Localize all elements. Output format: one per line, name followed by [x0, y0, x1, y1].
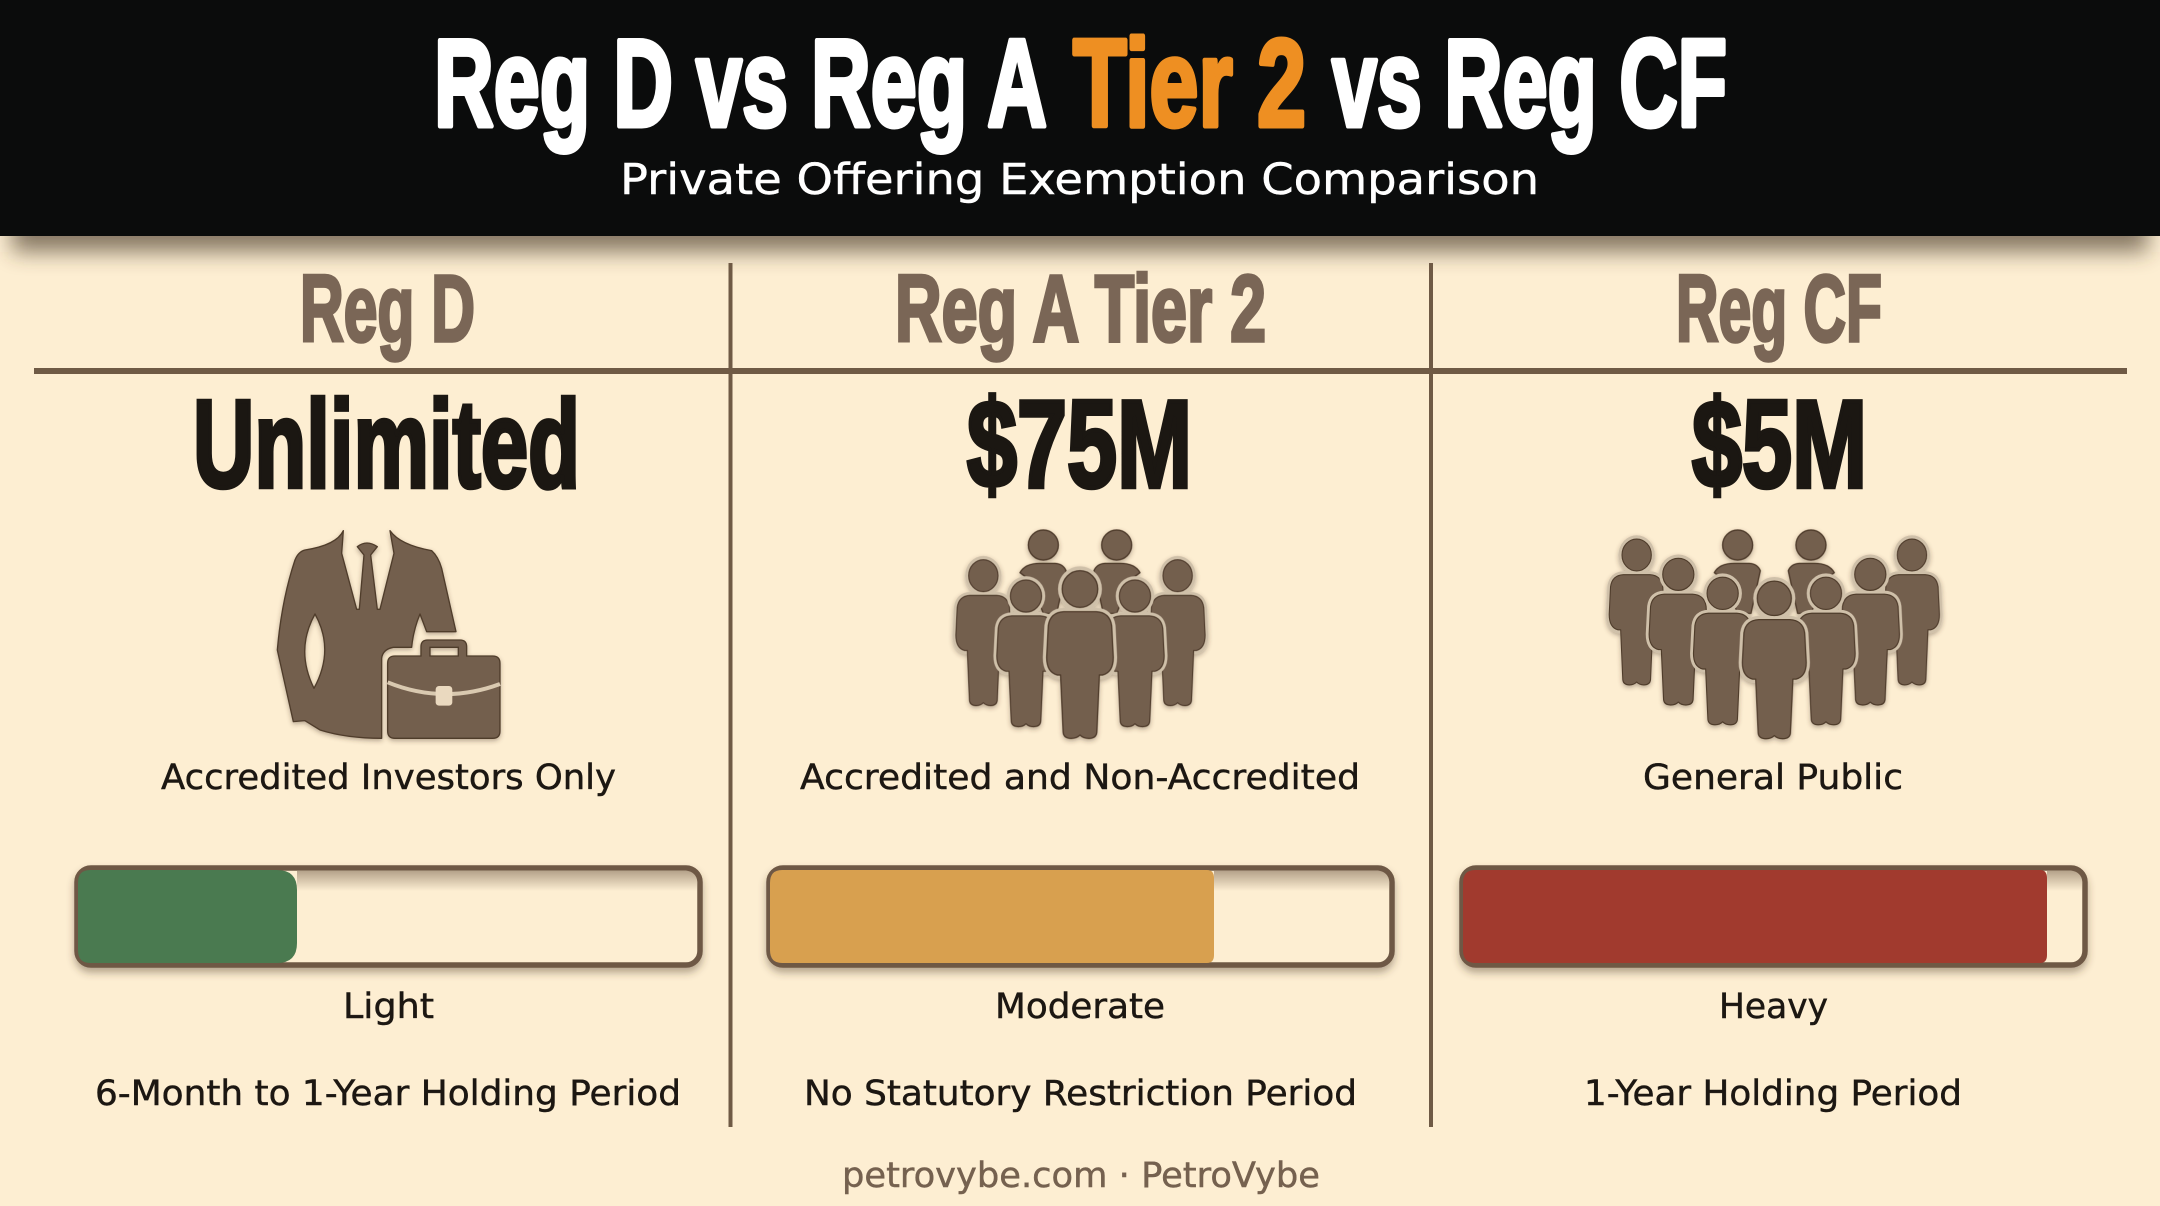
column heading: Reg D: Reg D [300, 256, 475, 362]
icon: crowd of nine people [1609, 530, 1939, 739]
holding period: 6-Month to 1-Year Holding Period [95, 1074, 681, 1114]
header shadow [12, 205, 2148, 252]
subtitle: Private Offering Exemption Comparison [620, 155, 1539, 205]
title: Tier 2 [1073, 15, 1306, 153]
investor type caption: Accredited and Non-Accredited [800, 758, 1360, 798]
compliance label: Heavy [1719, 987, 1828, 1027]
offering limit: Unlimited: Unlimited [193, 376, 580, 514]
column heading: Reg A Tier 2: Reg A Tier 2 [895, 256, 1266, 362]
panel: Reg CF [1462, 256, 2085, 1114]
investor type caption: General Public [1643, 758, 1903, 798]
icon: suit with briefcase [277, 531, 500, 738]
offering limit: $75M: $75M [967, 376, 1192, 514]
header band [0, 0, 2160, 236]
title: vs Reg CF [1332, 15, 1727, 153]
compliance label: Moderate [995, 987, 1165, 1027]
title: Reg D vs Reg A [434, 15, 1047, 153]
investor type caption: Accredited Investors Only [161, 758, 616, 798]
compliance bar: light [77, 868, 700, 965]
panel: Reg D [77, 256, 700, 1114]
offering limit: $5M: $5M [1692, 376, 1867, 514]
compliance bar: heavy [1462, 868, 2085, 965]
column heading: Reg CF: Reg CF [1676, 256, 1882, 362]
footer credit: petrovybe.com · PetroVybe [842, 1156, 1320, 1196]
compliance bar: moderate [769, 868, 1392, 965]
column dividers [34, 263, 2127, 1127]
panel: Reg A Tier 2 [769, 256, 1392, 1114]
icon: group of seven people [956, 530, 1205, 738]
holding period: No Statutory Restriction Period [804, 1074, 1357, 1114]
holding period: 1-Year Holding Period [1584, 1074, 1962, 1114]
compliance label: Light [343, 987, 434, 1027]
